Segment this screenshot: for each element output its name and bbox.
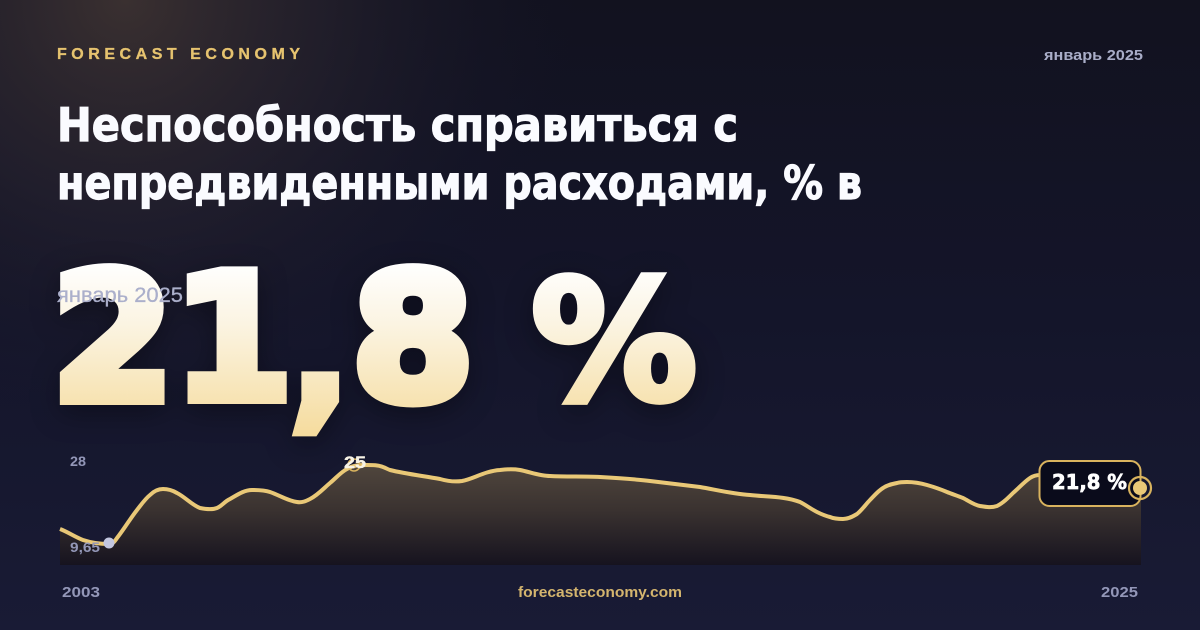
title (57, 98, 862, 210)
start year: 2003 (62, 584, 100, 601)
big value: 8 (352, 238, 474, 441)
value callout: 21,8 % (1052, 470, 1127, 494)
source: forecasteconomy.com (518, 584, 682, 601)
value callout (1040, 461, 1140, 506)
title: непредвиденными расходами, % в (57, 156, 862, 210)
big value: 2 (52, 238, 174, 441)
brand label: FORECAST ECONOMY (57, 46, 300, 63)
big value caption: январь 2025 (57, 284, 183, 307)
title: Неспособность справиться с (57, 98, 738, 152)
end marker (1129, 477, 1151, 499)
peak marker (348, 459, 360, 471)
chart area fill (60, 465, 1141, 565)
y label min: 9,65 (70, 540, 101, 555)
date top right: январь 2025 (1044, 47, 1143, 64)
area chart (60, 453, 1151, 565)
peak label: 25 (344, 453, 366, 472)
end year: 2025 (1101, 584, 1138, 601)
big value (52, 238, 697, 450)
y label max: 28 (70, 454, 87, 469)
chart line (60, 465, 1040, 544)
big value: 1 (172, 238, 294, 441)
min marker (104, 538, 114, 548)
big value: % (531, 246, 697, 439)
big value: , (287, 247, 353, 450)
